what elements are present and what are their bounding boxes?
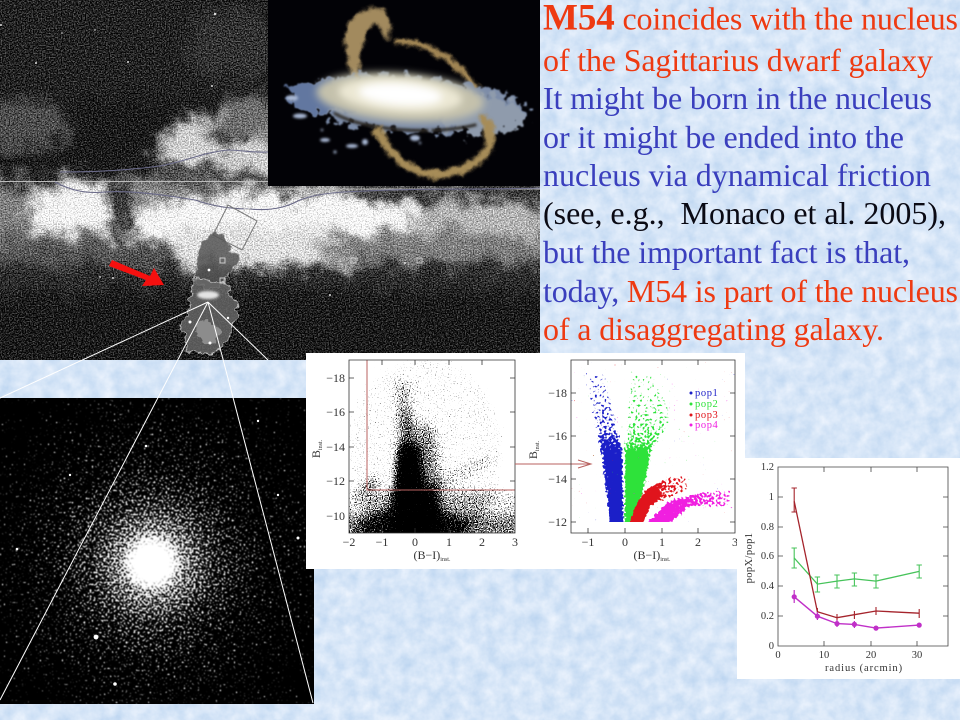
x axis labels: 10	[819, 650, 829, 661]
bright cluster core	[124, 535, 180, 591]
x axis labels: 3	[732, 535, 738, 549]
x axis labels: 2	[695, 535, 701, 549]
x axis title: (B−I)	[634, 548, 660, 562]
stream: upper plume	[344, 8, 390, 80]
y axis labels: −16	[548, 429, 567, 443]
y axis labels: 0.4	[761, 581, 775, 592]
black image background	[268, 0, 540, 186]
x axis title: radius (arcmin)	[825, 663, 903, 674]
panel: M54 globular cluster photograph	[0, 398, 314, 704]
pop3 red points	[627, 477, 688, 530]
plot frame and ticks	[778, 467, 948, 646]
red selection box	[367, 360, 515, 490]
Sagittarius dwarf contour body	[181, 232, 239, 355]
x axis title: inst.	[660, 557, 671, 563]
black field	[0, 398, 314, 704]
survey field square markers	[187, 198, 422, 283]
y axis title: inst.	[318, 439, 324, 450]
chart: four-population CMD	[526, 360, 738, 563]
panel: colour-magnitude diagrams	[306, 353, 745, 569]
zoom lines from Sagittarius core to cluster image	[0, 302, 313, 703]
line 4: or it might be ended into the	[543, 119, 904, 155]
resolved stars	[0, 398, 314, 704]
stream: ring upper arc	[397, 42, 479, 96]
y axis labels: 0.2	[761, 611, 774, 622]
line 8: today, M54 is part of the nucleus	[543, 273, 958, 309]
x axis labels: 1	[659, 535, 665, 549]
plot frame and ticks	[349, 360, 515, 533]
y axis labels: 0	[769, 641, 774, 652]
horizontal reference line	[0, 182, 540, 189]
x axis labels: −2	[343, 535, 355, 549]
series: pop2 green	[792, 548, 922, 592]
y axis labels: −12	[548, 515, 567, 529]
line 5: nucleus via dynamical friction	[543, 157, 931, 193]
y axis labels	[548, 386, 567, 529]
sky backing	[0, 0, 540, 360]
pop1 blue points	[583, 372, 624, 530]
x axis labels: 20	[866, 650, 876, 661]
y axis labels: −18	[326, 371, 345, 385]
white chart panel	[737, 458, 960, 679]
x axis labels: 2	[479, 535, 485, 549]
y axis labels: 0.6	[761, 551, 774, 562]
bright field stars	[16, 420, 299, 686]
x axis labels	[775, 650, 922, 661]
explanatory text block	[543, 0, 958, 347]
x axis labels: 0	[412, 535, 418, 549]
x axis labels: 30	[912, 650, 922, 661]
panel: Milky Way sky map	[0, 0, 540, 360]
y axis labels: −18	[548, 386, 567, 400]
series: pop3 red	[792, 488, 919, 621]
galactic plane and Sagittarius stream curves	[55, 150, 540, 210]
plot frame and ticks	[571, 360, 735, 533]
population legend: pop3	[695, 410, 718, 421]
line 2: of the Sagittarius dwarf galaxy	[543, 42, 933, 78]
line 7: but the important fact is that,	[543, 234, 910, 270]
y axis labels: −12	[326, 474, 345, 488]
x axis labels: 3	[512, 535, 518, 549]
series: pop4 magenta	[792, 590, 921, 630]
x axis labels: 1	[446, 535, 452, 549]
x axis title: inst.	[440, 557, 451, 563]
y axis labels: −14	[548, 472, 567, 486]
black scatter points	[349, 360, 515, 533]
line 3: It might be born in the nucleus	[543, 80, 932, 116]
white chart panel	[306, 353, 745, 569]
y axis labels: −14	[326, 440, 345, 454]
population legend: pop2	[695, 399, 718, 410]
x axis labels	[343, 535, 518, 549]
faint bright foreground stars	[0, 13, 406, 296]
x axis labels: 0	[622, 535, 628, 549]
y axis title: inst.	[535, 440, 541, 451]
y axis labels	[326, 371, 345, 523]
x axis labels: 0	[775, 650, 781, 661]
pop4 magenta points	[640, 490, 731, 530]
panel: population ratio vs radius chart	[737, 458, 960, 679]
x axis labels: −1	[582, 535, 594, 549]
y axis title: popX/pop1	[744, 533, 755, 583]
population legend: pop1	[695, 388, 718, 399]
y axis labels: −16	[326, 405, 345, 419]
population legend: pop4	[695, 420, 719, 431]
y axis title: B	[526, 451, 540, 459]
line 9: of a disaggregating galaxy.	[543, 311, 884, 347]
red arrow pointing to Sagittarius	[109, 260, 164, 286]
x axis labels: −1	[376, 535, 388, 549]
panel: Milky Way with Sagittarius stream rendering	[268, 0, 540, 186]
y axis labels: 1	[769, 492, 774, 503]
y axis labels: −10	[326, 509, 345, 523]
survey rectangle	[213, 205, 257, 250]
x axis title: (B−I)	[414, 548, 440, 562]
galaxy disk	[285, 65, 530, 139]
y axis title: B	[309, 450, 323, 458]
chart: full CMD scatter	[309, 355, 525, 563]
pop2 green points	[625, 372, 668, 530]
sky luminosity: star field and galactic band	[0, 0, 540, 360]
y axis labels: 1.2	[761, 462, 774, 473]
outer disk blue star clusters	[286, 95, 432, 154]
arrow linking the two diagrams	[515, 460, 591, 468]
y axis labels: 0.8	[761, 522, 774, 533]
population legend	[690, 388, 719, 431]
y axis labels	[761, 462, 775, 652]
x axis labels	[582, 535, 738, 549]
line 6: (see, e.g., Monaco et al. 2005),	[543, 195, 946, 231]
small circle marker	[242, 200, 252, 210]
stream: ring lower arc	[377, 118, 490, 174]
